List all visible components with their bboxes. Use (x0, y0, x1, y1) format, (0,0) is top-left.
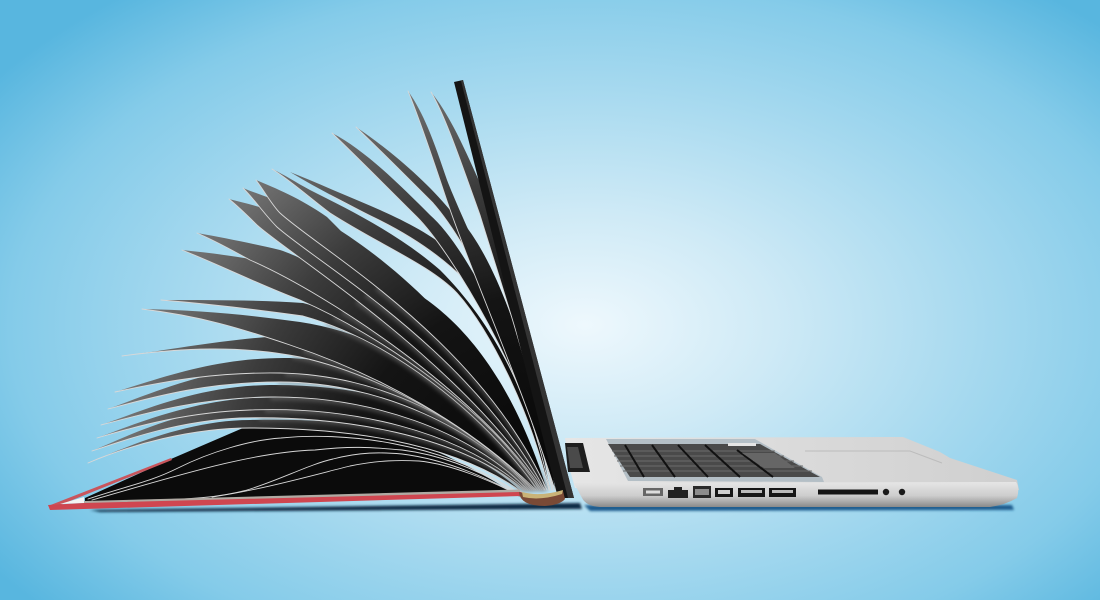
page 4 (101, 385, 528, 490)
page 14 (256, 180, 547, 490)
hinge slot (565, 443, 590, 472)
spine gold band (522, 490, 563, 498)
page 20 (431, 92, 556, 490)
port: magsafe (643, 488, 663, 496)
deck top surface (565, 437, 1019, 490)
page 19 (408, 91, 555, 490)
trackpad outline (805, 451, 942, 463)
page 15 (272, 169, 549, 490)
page 16 (290, 172, 550, 490)
port: usb 2 (769, 488, 796, 497)
book: fanned pages (85, 91, 556, 503)
cover diagonal edge (48, 458, 172, 506)
page edge above cover (84, 490, 520, 504)
front edge with rounded bottom (574, 482, 1018, 507)
port: usb 1 (738, 488, 765, 497)
page 17 (332, 133, 552, 490)
page 18 (356, 127, 553, 490)
page 1 (88, 420, 522, 492)
bottom page block (85, 428, 520, 503)
page 2 (92, 408, 524, 490)
page 7 (122, 336, 534, 490)
page 10 (182, 250, 540, 490)
white page corner (60, 497, 84, 504)
page 13 (243, 188, 545, 490)
page 3 (97, 397, 526, 490)
keyboard bezel (606, 439, 824, 482)
port: firewire (693, 486, 711, 498)
port: audio jack 2 (899, 489, 905, 495)
red cover strip (48, 492, 522, 510)
page 12 (229, 199, 544, 490)
port: mini display (715, 488, 733, 497)
page 9 (161, 300, 538, 490)
spine leather (519, 491, 565, 506)
page 8 (142, 309, 536, 490)
port: audio jack 1 (883, 489, 889, 495)
laptop base (565, 437, 1019, 507)
port: ethernet (668, 487, 688, 498)
page 5 (108, 366, 530, 490)
port: sd slot (818, 490, 878, 494)
laptop lid seen edge-on (454, 80, 574, 498)
page 6 (115, 358, 532, 490)
book cover and spine (48, 458, 565, 510)
keyboard (608, 443, 820, 477)
page 11 (197, 233, 542, 490)
ground shadow under book and laptop (90, 503, 1014, 512)
